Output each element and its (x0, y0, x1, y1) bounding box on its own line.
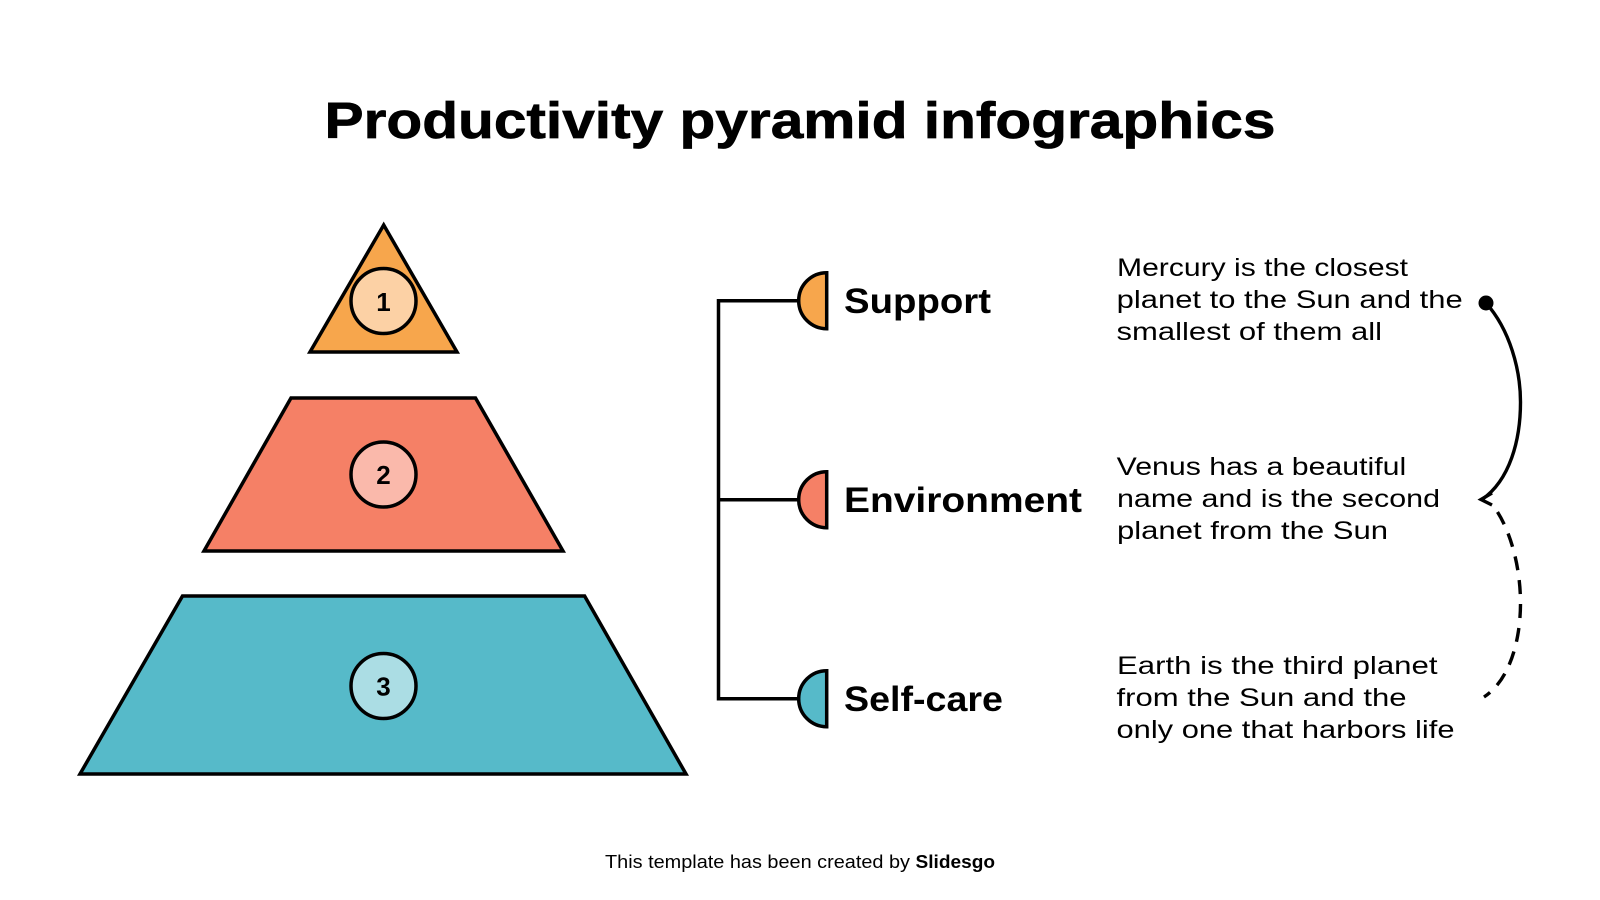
text block: mercury: planet to the Sun and the (1117, 286, 1463, 314)
text block: mercury (1116, 254, 1463, 346)
pyramid tier 1: 1 (376, 287, 391, 317)
arrow: solid curve (1478, 296, 1520, 505)
label: self-care: Self-care (844, 680, 1003, 719)
text block: earth: from the Sun and the (1116, 684, 1406, 712)
text block: venus (1117, 453, 1440, 545)
text block: venus: Venus has a beautiful (1117, 453, 1406, 481)
pyramid tier 2: 2 (376, 460, 391, 490)
text block: earth (1116, 652, 1454, 744)
pyramid tier 3 (80, 596, 686, 774)
text block: earth: only one that harbors life (1116, 716, 1454, 744)
marker: support (799, 273, 827, 329)
pyramid tier 2 (204, 398, 563, 551)
text block: venus: planet from the Sun (1117, 517, 1388, 545)
pyramid tier 1 (310, 225, 457, 352)
text block: earth: Earth is the third planet (1117, 652, 1438, 680)
text block: mercury: Mercury is the closest (1117, 254, 1408, 282)
marker: environment (799, 472, 827, 528)
label: environment: Environment (844, 481, 1082, 520)
footer credit: Slidesgo (916, 852, 995, 872)
title: Productivity pyramid infographics (324, 92, 1276, 149)
pyramid tier 3: 3 (376, 672, 391, 702)
text block: venus: name and is the second (1117, 485, 1440, 513)
text block: mercury: smallest of them all (1116, 318, 1382, 346)
label: support: Support (844, 282, 991, 321)
pyramid (80, 225, 686, 774)
footer credit: This template has been created by (605, 852, 910, 872)
marker: self-care (799, 671, 827, 727)
arrow: dashed curve (1484, 512, 1520, 697)
bracket connector (718, 301, 798, 699)
